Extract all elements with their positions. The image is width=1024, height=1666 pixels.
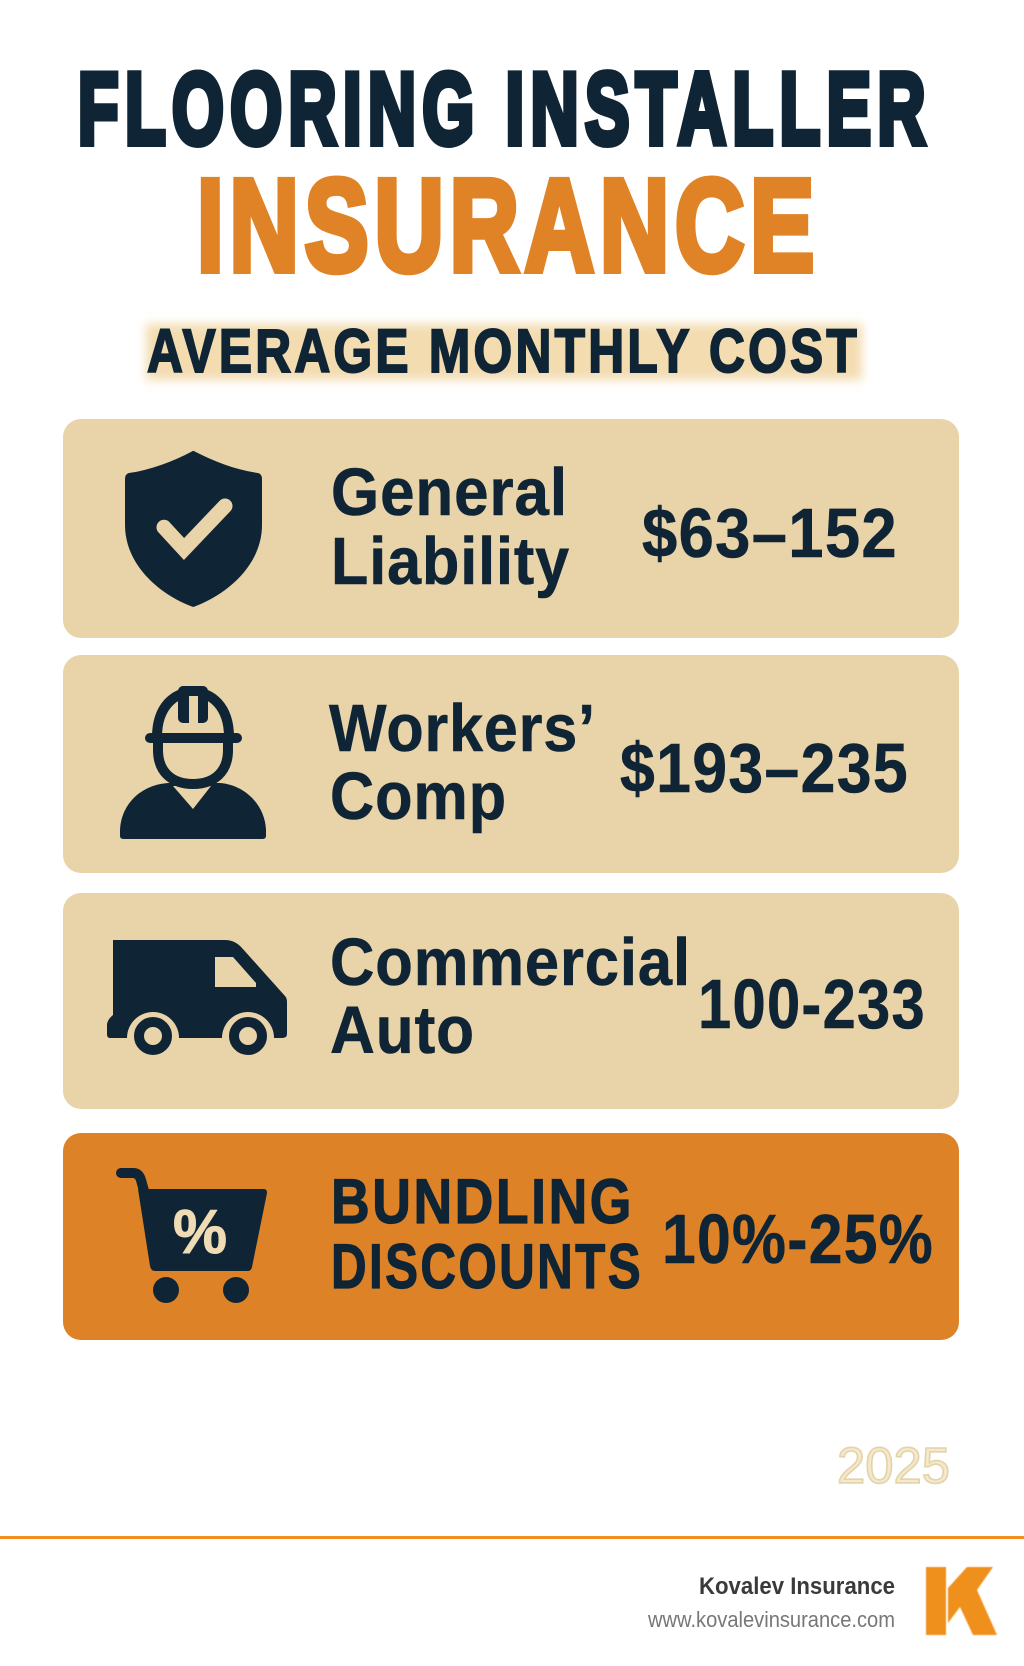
panel: general liability [63, 419, 959, 638]
label: bundling discounts [331, 1167, 643, 1302]
subtitle: average monthly cost: AVERAGE MONTHLY COST [147, 317, 860, 385]
label: workers comp: Workers’ [329, 691, 596, 766]
logo: orange K [926, 1567, 997, 1635]
footer: brand name and website: www.kovalevinsurance.com [647, 1607, 895, 1632]
title [78, 54, 932, 298]
icon: shield with check [125, 451, 262, 607]
label: commercial auto: Commercial [330, 925, 691, 1000]
label: workers comp: Comp [330, 759, 507, 834]
icon: worker with hard hat [120, 686, 266, 839]
panel: bundling discounts [63, 1133, 959, 1340]
label: general liability: General [331, 455, 568, 530]
label: workers comp [329, 691, 596, 834]
value: workers comp cost: $193–235 [620, 729, 909, 807]
value: commercial auto cost: 100-233 [698, 965, 926, 1043]
footer: brand name and website [647, 1573, 895, 1632]
label: commercial auto [330, 925, 691, 1068]
icon: shopping cart with percent [121, 1173, 267, 1303]
label: bundling discounts: DISCOUNTS [331, 1232, 643, 1302]
label: general liability [331, 455, 570, 599]
icon: shopping cart with percent: % [173, 1198, 227, 1267]
icon: delivery van [107, 940, 287, 1050]
title line: insurance: INSURANCE [197, 152, 820, 298]
label: general liability: Liability [331, 524, 570, 599]
value: bundling discount range: 10%-25% [662, 1200, 934, 1278]
label: commercial auto: Auto [330, 993, 475, 1068]
footer: brand name and website: Kovalev Insurance [699, 1573, 895, 1600]
year label: 2025 [837, 1437, 950, 1494]
panel: commercial auto [63, 893, 959, 1109]
footer divider [0, 1536, 1024, 1539]
panel: workers comp [63, 655, 959, 873]
value: general liability cost: $63–152 [642, 494, 898, 572]
label: bundling discounts: BUNDLING [331, 1167, 634, 1237]
